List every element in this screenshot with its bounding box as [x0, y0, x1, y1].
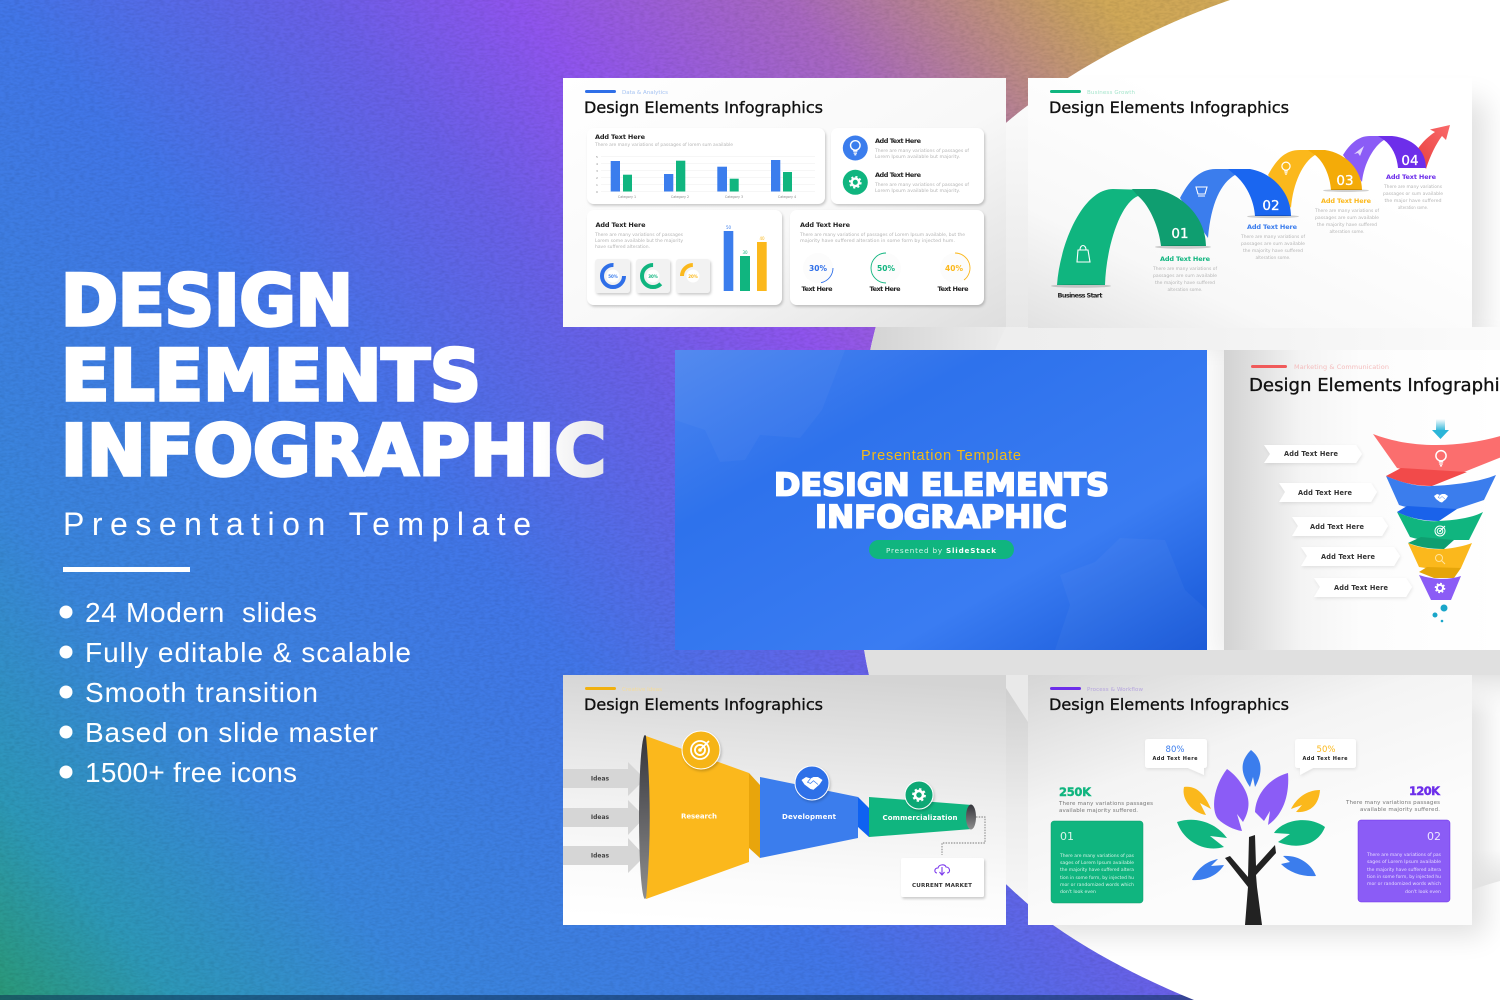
text: step captions: the majority have suffered — [1243, 248, 1304, 253]
text: step captions: alteration some. — [1256, 255, 1290, 260]
icon: research target — [682, 731, 720, 769]
title — [61, 260, 606, 492]
cover kicker: Presentation Template — [861, 448, 1021, 464]
card: column chart: 0 — [596, 190, 598, 194]
slide heading: Design Elements Infographics — [584, 695, 823, 714]
divider — [63, 567, 190, 572]
tree — [1177, 750, 1325, 925]
card: column chart: 3 — [596, 169, 598, 173]
text: step captions: Business Start — [1058, 292, 1102, 300]
card: icon list: There are many variations of passages of — [874, 148, 970, 153]
card: icon list — [831, 128, 984, 204]
card: donuts and bars: 30% — [648, 274, 658, 279]
arrow: red growth arrow — [1417, 125, 1450, 169]
card: icon list: There are many variations of passages of — [874, 182, 970, 187]
card: 01: tion in some form, by injected hu — [1060, 875, 1134, 880]
labels: funnel tags — [1264, 445, 1412, 597]
callout: 80% — [1145, 739, 1207, 775]
text: step captions: alteration some. — [1168, 287, 1202, 292]
card: donuts and bars: 30 — [742, 250, 748, 255]
labels: funnel tags: Add Text Here — [1284, 450, 1339, 458]
labels: funnel tags: Add Text Here — [1321, 553, 1376, 561]
funnel mouth — [639, 735, 651, 899]
card: donuts and bars: Lorem some available but the majority — [595, 238, 684, 243]
card: donuts and bars: 50 — [726, 225, 731, 230]
icon: development handshake — [795, 766, 829, 800]
feature list: Fully editable & scalable — [85, 637, 411, 668]
arch: step 03 yellow: 03 — [1336, 173, 1354, 189]
text: step captions: alteration some. — [1330, 229, 1364, 234]
card: current market — [901, 858, 984, 897]
background: soft grey shadows behind slides — [850, 100, 1500, 935]
card: donuts and bars: 40 — [759, 236, 765, 241]
panel: business growth slide: Business Growth — [1087, 90, 1136, 96]
slide heading: Design Elements Infographics — [1049, 695, 1289, 714]
card: donuts and bars: have suffered alteration. — [595, 244, 650, 249]
card: progress rings: 40% — [945, 264, 963, 273]
callout: 50%: 50% — [1317, 745, 1335, 755]
card: column chart: 2 — [596, 176, 598, 180]
labels: funnel tags: Add Text Here — [1310, 523, 1365, 531]
panel: marketing funnel slide — [1224, 350, 1500, 650]
text: step captions: passages are sum available — [1241, 241, 1306, 246]
text: step captions: Add Text Here — [1247, 223, 1298, 231]
text: step captions: There are many variations — [1383, 184, 1442, 189]
stat: 250K: 250K — [1059, 785, 1092, 799]
connector: dotted line — [942, 817, 985, 855]
card: 02 — [1358, 820, 1450, 902]
card: column chart: Category 1 — [618, 195, 636, 199]
text: step captions: Add Text Here — [1386, 173, 1437, 181]
arrows: ideas: Ideas — [591, 776, 610, 782]
arrows: ideas — [563, 762, 645, 873]
title: DESIGN — [61, 260, 353, 342]
card: column chart: 4 — [596, 162, 598, 166]
callout: 50% — [1295, 739, 1356, 775]
panel: cover slide — [675, 350, 1207, 650]
arrows: ideas: Ideas — [591, 814, 610, 821]
stat: 250K — [1058, 785, 1153, 814]
labels: funnel tags: Add Text Here — [1334, 584, 1389, 592]
text: step captions: alteration some. — [1398, 205, 1428, 210]
stage: research — [646, 736, 760, 899]
arch base shadows — [1051, 189, 1369, 288]
feature list — [60, 597, 411, 788]
card: 01 — [1051, 821, 1143, 903]
text: step captions: passages or sum available — [1383, 191, 1444, 196]
callout: 80%: 80% — [1166, 745, 1184, 755]
card: 01: mor or randomized words which — [1060, 882, 1134, 887]
card: 02: There are many variations of pas — [1366, 852, 1441, 857]
presenter pill — [869, 540, 1014, 559]
stat: 250K: available majority suffered. — [1059, 808, 1138, 814]
text: step captions: the major have suffered — [1384, 198, 1442, 203]
arch: step 04 purple — [1343, 136, 1426, 182]
card: progress rings: 50% — [877, 264, 895, 273]
card: 01: sages of Lorem Ipsum available — [1060, 860, 1134, 865]
icon: commercialization gear — [905, 781, 933, 809]
stage: development: Development — [782, 813, 837, 821]
card: 02: mor or randomized words which — [1367, 881, 1441, 886]
card: progress rings: Text Here — [870, 285, 901, 293]
card: icon list: Add Text Here — [875, 137, 922, 145]
feature list: Based on slide master — [85, 717, 378, 748]
text: step captions: Add Text Here — [1160, 255, 1211, 263]
slide heading: Design Elements Infographics — [584, 98, 823, 117]
feature list: Smooth transition — [85, 677, 318, 708]
stage: commercialization: Commercialization — [882, 814, 958, 822]
text: step captions: There are many variations of — [1152, 266, 1218, 271]
panel: data and analytics slide — [563, 78, 1006, 327]
card: 02: the majority have suffered altera — [1367, 867, 1441, 872]
stat: 120K: There many variations passages — [1345, 800, 1440, 806]
text: step captions: Add Text Here — [1321, 197, 1372, 205]
card: current market: CURRENT MARKET — [912, 883, 972, 889]
card: 02: tion in some form, by injected hu — [1367, 874, 1441, 879]
panel: marketing funnel slide: Marketing & Communication — [1294, 363, 1389, 371]
card: 01: the majority have suffered altera — [1060, 867, 1134, 872]
text: step captions: There are many variations of — [1240, 234, 1306, 239]
card: icon list: Add Text Here — [875, 171, 922, 179]
panel: data and analytics slide: Data & Analytics — [622, 90, 668, 96]
card: column chart: Category 3 — [725, 195, 743, 199]
text: step captions: the majority have suffered — [1317, 222, 1378, 227]
callout: 80%: Add Text Here — [1152, 756, 1198, 762]
stage: research: Research — [681, 812, 717, 820]
card: 01: don't look even — [1060, 889, 1096, 894]
card: column chart: 5 — [596, 155, 598, 159]
panel: process tree slide: Process & Workflow — [1087, 687, 1144, 693]
funnel — [1373, 434, 1500, 600]
decorative gears — [675, 350, 1207, 650]
text: step captions — [1058, 173, 1444, 300]
subtitle: Presentation Template — [63, 506, 531, 542]
feature list: 24 Modern slides — [85, 597, 317, 628]
card: donuts and bars: 50% — [608, 274, 618, 279]
labels: funnel tags: Add Text Here — [1298, 489, 1353, 497]
text: step captions: passages are sum available — [1315, 215, 1380, 220]
text: step captions: passages are sum available — [1153, 273, 1218, 278]
cover title: DESIGN ELEMENTS — [774, 468, 1109, 504]
drops — [1432, 604, 1448, 622]
card: column chart: 1 — [596, 183, 598, 187]
card: progress rings: There are many variations of passages of Lorem Ipsum available, but the — [799, 232, 966, 237]
panel: innovation funnel slide: Creative Ideas — [622, 687, 662, 693]
card: column chart: Category 4 — [778, 195, 796, 199]
panel: innovation funnel slide — [563, 675, 1006, 925]
text: step captions: There are many variations of — [1314, 208, 1380, 213]
card: 02: 02 — [1427, 830, 1441, 843]
title: INFOGRAPHIC — [61, 410, 606, 492]
arch: step 02 blue — [1180, 169, 1291, 238]
cover title — [774, 468, 1109, 536]
panel: process tree slide — [1028, 675, 1472, 925]
arrows: ideas: Ideas — [591, 852, 610, 860]
card: progress rings — [790, 210, 984, 305]
arrow: cyan down — [1432, 419, 1449, 439]
stat: 120K: 120K — [1409, 784, 1441, 798]
stage: commercialization — [869, 797, 976, 837]
cover title: INFOGRAPHIC — [815, 500, 1067, 536]
card: 02: don't look even — [1405, 889, 1441, 894]
title: ELEMENTS — [61, 335, 481, 417]
card: donuts and bars: 20% — [688, 274, 698, 279]
slide heading: Design Elements Infographics — [1049, 98, 1289, 117]
arch: step 01 green: 01 — [1171, 226, 1189, 242]
card: 01: 01 — [1060, 830, 1074, 843]
stat: 120K: available majority suffered. — [1360, 807, 1440, 813]
card: column chart: Add Text Here — [595, 133, 646, 141]
stat: 250K: There many variations passages — [1058, 801, 1153, 807]
card: 01: There are many variations of pas — [1059, 853, 1134, 858]
stat: 120K — [1345, 784, 1441, 813]
card: progress rings: Add Text Here — [800, 221, 851, 229]
arch: step 01 green — [1057, 189, 1206, 285]
card: progress rings: majority have suffered alteration in some form by injected hum. — [800, 238, 955, 243]
arch: step 03 yellow — [1268, 150, 1362, 208]
presenter pill: Presented by SlideStack — [886, 546, 996, 555]
text: step captions: the majority have suffered — [1155, 280, 1216, 285]
card: 02: sages of Lorem Ipsum available — [1367, 859, 1441, 864]
card: donuts and bars: There are many variations of passages — [594, 232, 683, 237]
arch: step 04 purple: 04 — [1401, 153, 1419, 169]
arch: step 02 blue: 02 — [1262, 198, 1280, 214]
feature list: 1500+ free icons — [85, 757, 297, 788]
panel: business growth slide — [1028, 78, 1472, 328]
background: white curved shape — [856, 0, 1500, 1000]
card: progress rings: Text Here — [938, 285, 969, 293]
card: progress rings: Text Here — [802, 285, 833, 293]
callout: 50%: Add Text Here — [1302, 756, 1348, 762]
card: donuts and bars — [587, 210, 782, 305]
card: column chart: Category 2 — [671, 195, 689, 199]
card: icon list: Lorem Ipsum available but majority. — [875, 188, 960, 193]
stage: development — [760, 777, 869, 858]
card: icon list: Lorem Ipsum available but majority. — [875, 154, 960, 159]
card: column chart — [587, 128, 825, 204]
card: donuts and bars: Add Text Here — [596, 221, 646, 229]
card: column chart: There are many variations of passages of lorem sum available — [594, 142, 734, 147]
card: progress rings: 30% — [809, 264, 827, 273]
